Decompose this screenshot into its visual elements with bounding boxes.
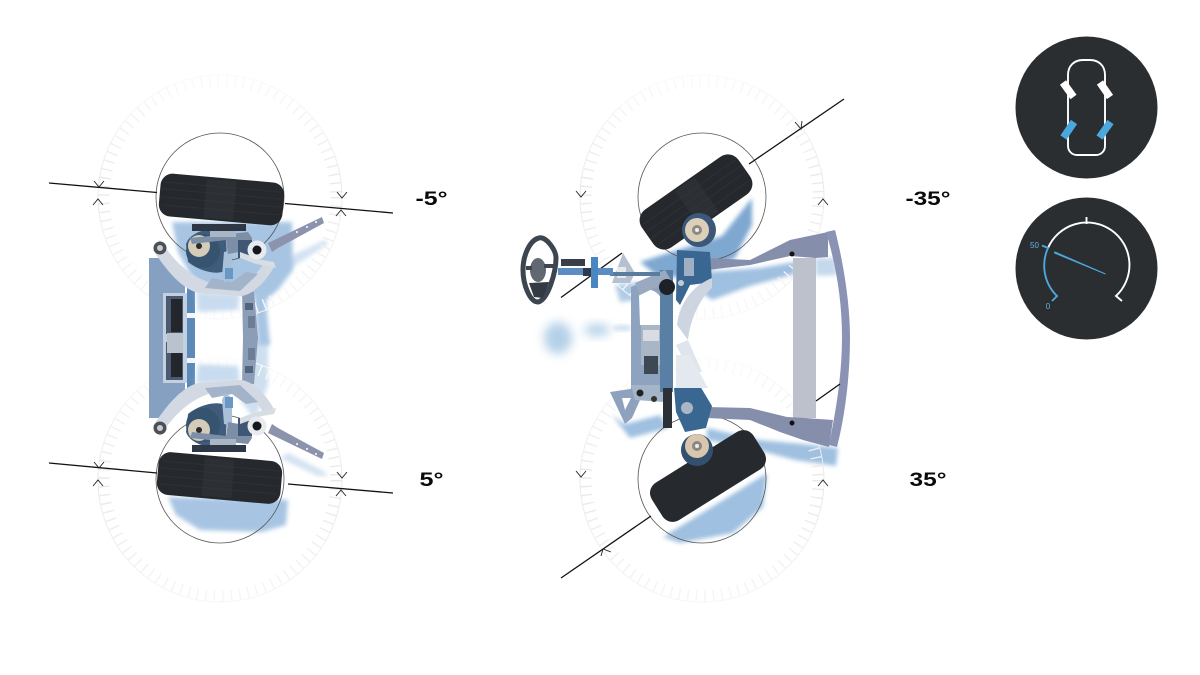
angle line: front upper bbox=[561, 99, 844, 298]
steering column bbox=[558, 257, 613, 288]
dial: front lower protractor bbox=[580, 358, 824, 602]
label: 5 degrees: 5° bbox=[420, 470, 444, 491]
angle line: rear upper bbox=[49, 183, 393, 213]
label: minus 5 degrees: -5° bbox=[416, 189, 448, 210]
icon: speed gauge: 0 bbox=[1046, 302, 1051, 311]
steering wheel bbox=[523, 238, 556, 302]
angle line: front lower bbox=[561, 516, 651, 578]
shadow: front chassis bbox=[544, 198, 838, 543]
tire: rear lower wheel at 5 degrees bbox=[156, 451, 283, 505]
icon: car with steered wheels bbox=[1016, 36, 1158, 178]
tire: front upper wheel at -35 degrees bbox=[634, 149, 758, 255]
markers: front chevrons bbox=[576, 121, 828, 556]
rear frame: bumper beam and cross bar bbox=[707, 230, 850, 447]
angle line: rear lower bbox=[49, 463, 393, 493]
label: 35 degrees: 35° bbox=[910, 470, 946, 491]
label: minus 35 degrees: -35° bbox=[906, 189, 950, 210]
icon: speed gauge bbox=[1016, 198, 1158, 340]
strut: front lower hub bbox=[681, 434, 713, 466]
line segment: front lower over frame bbox=[816, 384, 840, 401]
chassis: front subframe bbox=[610, 250, 712, 432]
dial: rear upper protractor bbox=[98, 75, 342, 319]
dial: front upper protractor bbox=[580, 75, 824, 319]
panel: rear axle steering diagram bbox=[49, 75, 393, 602]
chassis: rear subframe upper half bbox=[149, 217, 324, 338]
chassis: rear subframe centre section bbox=[149, 333, 258, 353]
markers: rear upper chevrons bbox=[93, 181, 347, 216]
panel: front axle steering diagram bbox=[523, 75, 850, 602]
tire: front lower wheel bbox=[645, 426, 771, 526]
icon: speed gauge: 50 bbox=[1030, 241, 1039, 250]
tire: rear upper wheel at -5 degrees bbox=[158, 173, 285, 226]
chassis: rear subframe lower half bbox=[149, 338, 324, 459]
strut: front upper hub bbox=[682, 213, 716, 247]
shadow: rear chassis bbox=[168, 222, 328, 532]
dial: rear lower protractor bbox=[98, 358, 342, 602]
markers: rear lower chevrons bbox=[93, 462, 347, 496]
